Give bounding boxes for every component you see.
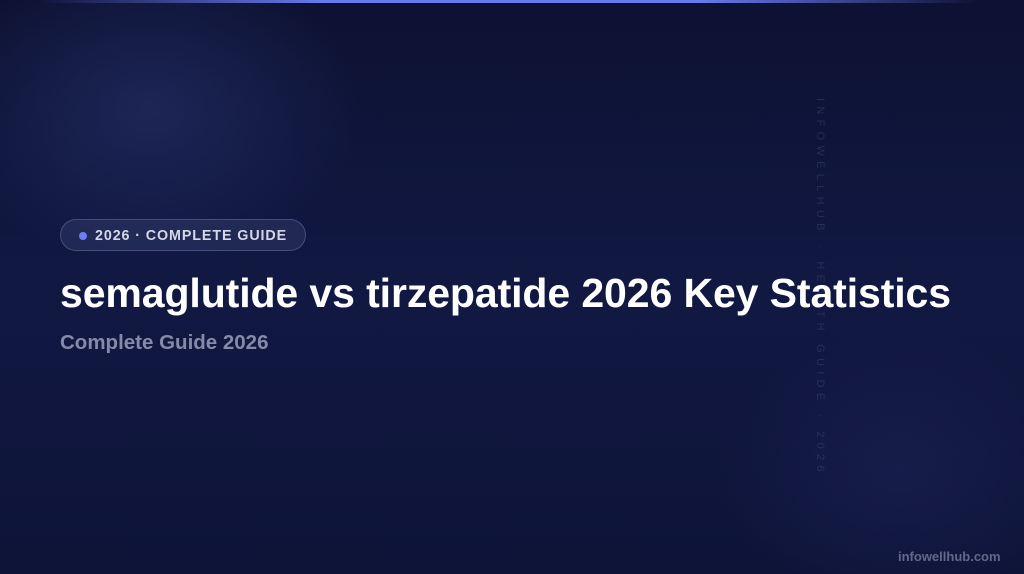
- badge dot: [79, 232, 87, 240]
- title: semaglutide vs tirzepatide 2026 Key Statistics: [60, 270, 951, 316]
- footer url: infowellhub.com: [898, 549, 1001, 564]
- vertical watermark: INFOWELLHUB · HEALTH GUIDE · 2026: [814, 98, 826, 477]
- badge: [60, 219, 306, 251]
- badge text: 2026 · COMPLETE GUIDE: [95, 228, 287, 244]
- subtitle: Complete Guide 2026: [60, 331, 268, 354]
- top accent bar: [40, 0, 980, 3]
